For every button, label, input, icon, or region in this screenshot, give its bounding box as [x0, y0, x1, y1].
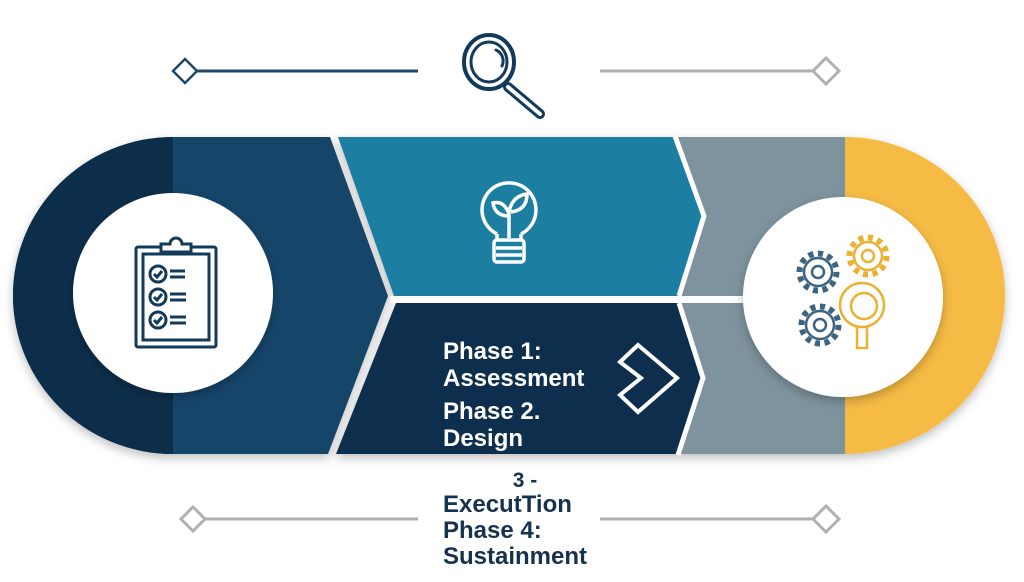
- circle: clipboard: [73, 193, 273, 393]
- bottom text: Sustainment: [443, 543, 587, 570]
- phase text: Phase 2.: [443, 398, 540, 425]
- phase text: Phase 1:: [443, 338, 542, 365]
- panel: dark bottom: [336, 303, 703, 454]
- bottom text: ExecutTion: [443, 491, 572, 518]
- panel: left navy: [13, 137, 388, 454]
- phase text: [443, 338, 584, 452]
- bottom text: 3 -: [513, 469, 537, 492]
- bottom connector lines: [181, 506, 839, 532]
- bottom text: Phase 4:: [443, 517, 542, 544]
- circle: gears: [743, 197, 943, 397]
- white separators: [390, 136, 760, 455]
- top connector line with magnifier: [173, 35, 839, 114]
- panel: teal top: [338, 137, 704, 296]
- panel: grey: [640, 137, 850, 454]
- phase text: Assessment: [443, 365, 584, 392]
- bottom text: [443, 469, 587, 570]
- panel: yellow end: [845, 137, 1005, 454]
- icon: clipboard: [136, 238, 216, 347]
- process band: [13, 137, 1005, 454]
- icon: chevron outline: [620, 345, 677, 412]
- icon: lightbulb: [482, 183, 536, 262]
- icon: gears: [800, 238, 886, 348]
- phase text: Design: [443, 425, 523, 452]
- icon: magnifier: [464, 35, 540, 114]
